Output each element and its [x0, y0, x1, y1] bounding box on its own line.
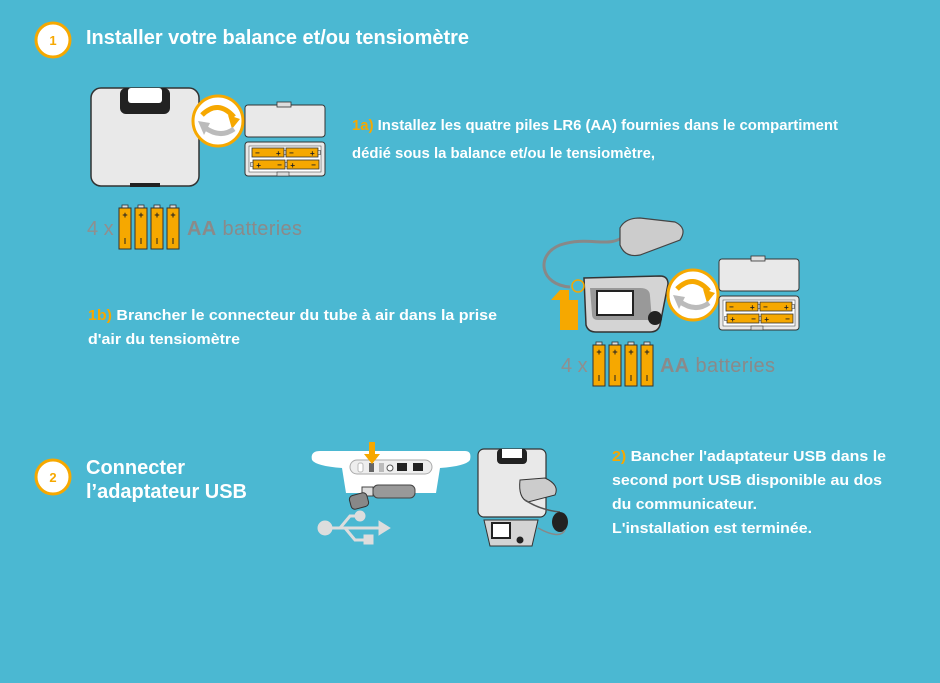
icon: battery case 2 [719, 256, 799, 330]
icon: scale [91, 88, 199, 187]
batteries label 2 [561, 342, 775, 386]
icon: scale and monitor [478, 449, 568, 546]
step 2 badge [36, 460, 70, 494]
title step 2: Connecter [86, 457, 185, 479]
text 2: du communicateur. [612, 496, 757, 513]
text 1a: 1a) Installez les quatre piles LR6 (AA) fournies dans le compartiment [352, 117, 838, 134]
icon: communicator with USB [312, 442, 470, 543]
title step 2 [86, 457, 247, 503]
text 1b: 1b) Brancher le connecteur du tube à air dans la prise [88, 307, 497, 324]
text 1a: dédié sous la balance et/ou le tensiomètre, [352, 145, 655, 162]
text 2: 2) Bancher l'adaptateur USB dans le [612, 448, 886, 465]
text 2: L'installation est terminée. [612, 520, 812, 537]
text 1a [352, 117, 838, 162]
batteries label 2: 4 x [561, 355, 588, 377]
text 1b [88, 307, 497, 348]
icon: battery case [245, 102, 325, 176]
text 1b: d'air du tensiomètre [88, 331, 240, 348]
icon: swap arrows 2 [668, 270, 718, 320]
step 1 badge: 1 [49, 33, 57, 48]
title step 2: l’adaptateur USB [86, 481, 247, 503]
batteries label 2: AA batteries [660, 355, 775, 377]
icon: blood pressure monitor with cuff [544, 218, 683, 332]
batteries label 1: AA batteries [187, 218, 302, 240]
batteries label 1 [87, 205, 302, 249]
batteries label 1: 4 x [87, 218, 114, 240]
text 2 [612, 448, 886, 537]
title step 1: Installer votre balance et/ou tensiomètre [86, 27, 469, 49]
step 1 badge [36, 23, 70, 57]
icon: swap arrows [193, 96, 243, 146]
text 2: second port USB disponible au dos [612, 472, 882, 489]
step 2 badge: 2 [49, 470, 57, 485]
